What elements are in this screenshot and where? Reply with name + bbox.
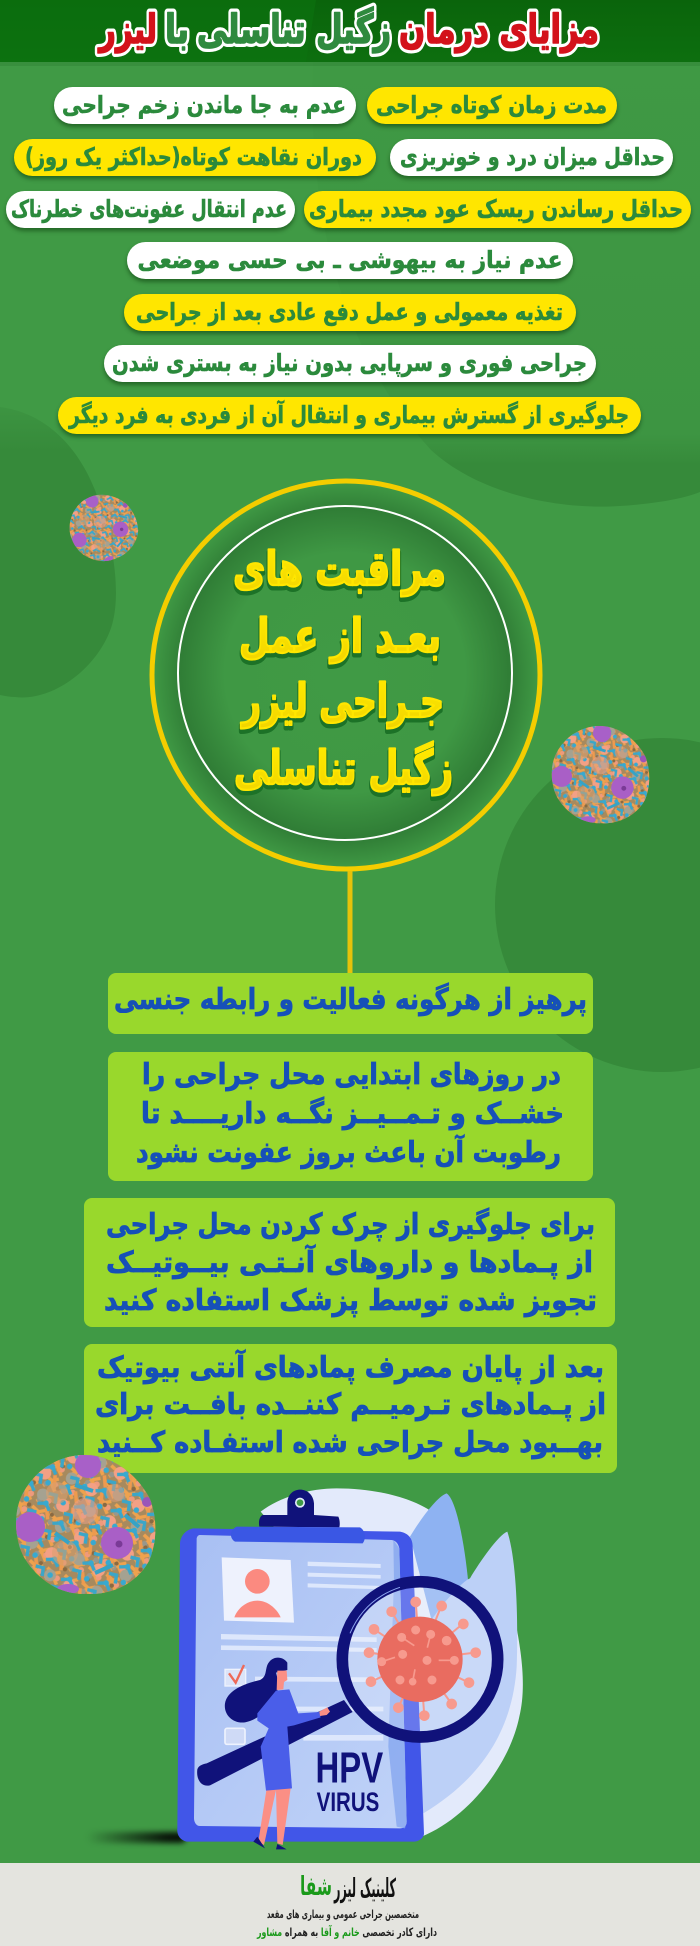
virus surface dots — [378, 1626, 458, 1685]
benefit pill: no scar — [54, 87, 356, 124]
benefit pill: outpatient — [104, 345, 596, 382]
care box 3: از پـمادها و داروهای آنـتـی بیــوتیــک — [106, 1244, 593, 1280]
care box 3: تجویز شده توسط پزشک استفاده کنید — [104, 1283, 597, 1318]
benefit pill: short surgery time: مدت زمان کوتاه جراحی — [376, 91, 607, 119]
benefit pill: short surgery time — [367, 87, 617, 124]
title — [98, 6, 599, 53]
clinic logo — [300, 1872, 396, 1904]
hair — [225, 1658, 287, 1723]
magnifier lens — [342, 1582, 498, 1737]
footer: کلینیک لیزر — [333, 1874, 396, 1904]
face — [277, 1671, 287, 1690]
dress — [257, 1689, 321, 1791]
icon: large virus bottom left — [10, 1450, 160, 1600]
care box 4: بهــبود محل جراحی شده استفـاده کــنید — [97, 1425, 603, 1459]
clip — [231, 1490, 365, 1543]
care box 1: پرهیز از هرگونه فعالیت و رابطه جنسی — [114, 982, 587, 1017]
illustration: HPV clipboard and magnifier — [177, 1488, 523, 1849]
header band — [0, 0, 700, 66]
legs — [258, 1788, 291, 1845]
benefit pill: no infection transfer: عدم انتقال عفونت‌های خطرناک — [11, 195, 287, 223]
circle heading: بعـد از عمل — [239, 609, 441, 664]
benefit pill: no scar: عدم به جا ماندن زخم جراحی — [62, 91, 346, 119]
icon: small virus top left — [55, 480, 151, 576]
circle heading: مراقبت های — [233, 545, 446, 600]
background blob: lower right — [495, 738, 700, 1072]
care box 2 — [108, 1052, 593, 1181]
care box 4: از پـمادهای تـرمیــم کننــده بافــت برای — [95, 1387, 606, 1422]
title: با — [165, 7, 189, 53]
circle heading: بعـد از عمل — [239, 612, 441, 667]
care box 2: در روزهای ابتدایی محل جراحی را — [142, 1057, 561, 1091]
benefit pill: short recovery — [14, 139, 376, 176]
circle heading: مراقبت های — [233, 542, 446, 597]
circle heading: زگیل تناسلی — [234, 744, 453, 799]
connector line — [348, 871, 352, 973]
central circle — [152, 481, 540, 869]
clipboard body — [177, 1528, 424, 1842]
care box 4: بعد از پایان مصرف پمادهای آنتی بیوتیک — [97, 1349, 604, 1385]
HPV VIRUS label — [315, 1744, 384, 1817]
circle heading: زگیل تناسلی — [234, 741, 453, 796]
care box 1 — [108, 973, 593, 1034]
benefit pill: short recovery: دوران نقاهت کوتاه(حداکثر یک روز) — [25, 143, 362, 171]
icon: virus right — [548, 722, 652, 828]
care box 4 — [84, 1344, 617, 1473]
clipboard sheet — [194, 1535, 407, 1828]
care box 2: خشــک و تـمــیــز نگــه داریــــد تا — [141, 1096, 564, 1130]
HPV VIRUS label: VIRUS — [317, 1787, 379, 1817]
care box 2: رطوبت آن باعث بروز عفونت نشود — [136, 1134, 561, 1169]
benefit pill: no infection transfer — [6, 191, 295, 228]
title: زگیل تناسلی — [197, 6, 391, 53]
hand — [319, 1707, 330, 1716]
care box 3: برای جلوگیری از چرک کردن محل جراحی — [106, 1207, 595, 1242]
checkboxes — [225, 1665, 246, 1744]
benefit pill: prevents spread — [58, 397, 641, 434]
title: لیزر — [98, 7, 157, 53]
blue leaf — [410, 1493, 468, 1640]
background leaf shape — [261, 1488, 523, 1837]
title: لیزر — [98, 7, 157, 53]
circle heading — [233, 542, 453, 799]
clipboard shadow — [86, 1832, 186, 1843]
circle heading: جـراحی لیزر — [241, 677, 444, 732]
HPV VIRUS label: HPV — [315, 1744, 384, 1793]
title: مزایای درمان — [399, 7, 599, 53]
footer line: specialists: متخصصین جراحی عمومی و بیماری های مقعد — [267, 1907, 419, 1922]
benefit pill: normal nutrition: تغذیه معمولی و عمل دفع عادی بعد از جراحی — [136, 298, 563, 326]
benefit pill: no anesthesia: عدم نیاز به بیهوشی ـ بی حسی موضعی — [138, 246, 562, 274]
clinic logo: شفا — [300, 1872, 332, 1902]
lens ring — [342, 1582, 498, 1737]
footer — [0, 1863, 700, 1946]
light leaf — [403, 1532, 517, 1813]
background blob: top right — [312, 0, 700, 507]
shoes — [253, 1837, 265, 1848]
title: زگیل تناسلی — [197, 6, 391, 53]
care box 3 — [84, 1198, 615, 1327]
magnifier handle — [197, 1700, 353, 1786]
virus spikes — [365, 1598, 480, 1720]
woman figure — [225, 1658, 330, 1849]
benefit pill: normal nutrition — [124, 294, 576, 331]
circle heading: جـراحی لیزر — [241, 674, 444, 729]
virus body — [377, 1617, 463, 1702]
benefit pill: minimal pain — [390, 139, 673, 176]
footer line: staff: دارای کادر تخصصی خانم و آقا به همراه مشاور — [256, 1925, 437, 1940]
photo card — [222, 1557, 294, 1623]
benefit pill: outpatient: جراحی فوری و سرپایی بدون نیاز به بستری شدن — [112, 349, 587, 377]
title: مزایای درمان — [399, 7, 599, 53]
title: با — [165, 7, 189, 53]
background blob: left — [0, 407, 116, 697]
form lines — [221, 1562, 383, 1741]
